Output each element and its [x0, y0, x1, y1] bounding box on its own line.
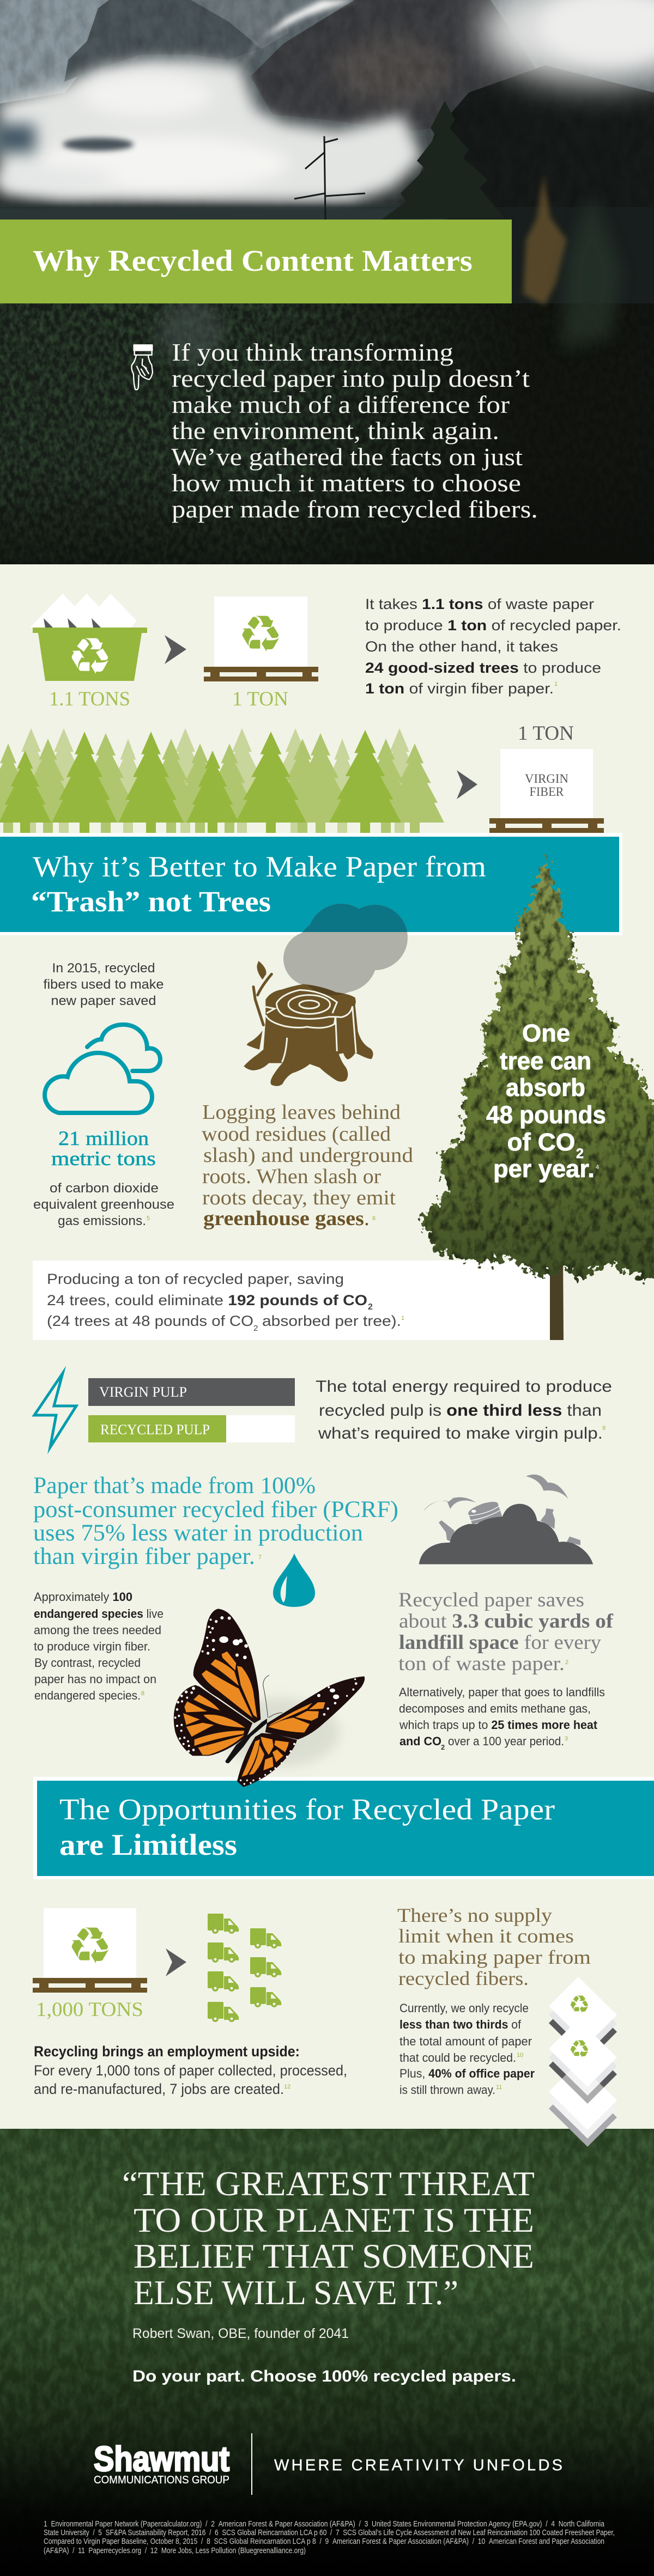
- call to action: Do your part. Choose 100% recycled papers.: [132, 2367, 516, 2385]
- text: endangered species: to produce virgin fiber.: [34, 1640, 150, 1653]
- text: endangered species: Approximately 100: [34, 1590, 132, 1604]
- text: recycling rate: Plus, 40% of office paper: [399, 2067, 535, 2080]
- text: landfill space: landfill space for every: [399, 1631, 602, 1654]
- text: logging residues: 6: [372, 1215, 376, 1222]
- tagline: WHERE CREATIVITY UNFOLDS: [274, 2457, 562, 2474]
- quote: TO OUR PLANET IS THE: [134, 2201, 534, 2239]
- stat: 21 million metric tons: metric tons: [51, 1148, 156, 1170]
- text: landfill space: Recycled paper saves: [398, 1589, 584, 1611]
- panel: forest photo footer: [0, 2129, 654, 2576]
- intro paragraph: We’ve gathered the facts on just: [171, 443, 523, 471]
- stat: 21 million metric tons: [33, 1128, 174, 1228]
- footnotes: (AF&PA) / 11 Paperrecycles.org / 12 More Jobs, Less Pollution (Bluegreenalliance.org): [44, 2546, 306, 2555]
- callout: 192 pounds: 2: [368, 1302, 373, 1312]
- stat: 2015 intro text: new paper saved: [51, 994, 156, 1008]
- icon: virgin fiber paper on pallet: FIBER: [530, 785, 564, 799]
- label: 1 ton: 1 TON: [232, 688, 288, 710]
- callout: 192 pounds: 1: [401, 1315, 404, 1322]
- callout: 192 pounds: Producing a ton of recycled paper, saving: [47, 1271, 344, 1287]
- text: energy: [316, 1378, 612, 1442]
- text: water use: post-consumer recycled fiber (PCRF): [33, 1497, 398, 1523]
- intro paragraph: the environment, think again.: [172, 417, 499, 444]
- quote attribution: Robert Swan, OBE, founder of 2041: [132, 2326, 349, 2341]
- quote: BELIEF THAT SOMEONE: [134, 2237, 534, 2275]
- intro paragraph: make much of a difference for: [172, 391, 510, 418]
- text: endangered species: endangered species.: [34, 1689, 141, 1702]
- text: water use: than virgin fiber paper.: [33, 1544, 255, 1569]
- photo: tall spruce tree: [420, 856, 654, 1340]
- text: one tree can absorb: One: [522, 1019, 570, 1047]
- icon: lightning bolt: [34, 1373, 76, 1447]
- text: water use: Paper that’s made from 100%: [33, 1473, 316, 1499]
- logo: Shawmut Communications Group: COMMUNICATIONS GROUP: [94, 2474, 229, 2486]
- text: energy: 9: [602, 1425, 605, 1432]
- icon: recycled paper on pallet: [204, 596, 318, 681]
- text: tons of waste paper: 24 good-sized trees to produce: [365, 660, 601, 676]
- text: recycling rate: Currently, we only recycle: [399, 2001, 529, 2015]
- panel: paper comparison: [0, 594, 621, 833]
- text: water use: uses 75% less water in production: [33, 1520, 363, 1546]
- text: no supply limit: to making paper from: [398, 1946, 591, 1968]
- icon: landfill with birds: [419, 1475, 593, 1564]
- text: landfill space: 2: [441, 1743, 445, 1751]
- heading band: better from trash: [0, 833, 622, 935]
- panel: hero mountain photo: [0, 0, 654, 564]
- illustration: monarch butterfly: [174, 1609, 365, 1787]
- stat: 21 million metric tons: 5: [147, 1215, 150, 1222]
- text: recycling rate: that could be recycled.: [399, 2051, 516, 2065]
- text: one tree can absorb: per year.: [493, 1155, 595, 1183]
- bar chart: energy use: VIRGIN PULP: [99, 1384, 187, 1400]
- icon: pointing hand: [131, 345, 153, 389]
- stat: 21 million metric tons: gas emissions.: [58, 1214, 146, 1228]
- text: energy: The total energy required to produce: [316, 1378, 612, 1396]
- text: logging residues: wood residues (called: [202, 1123, 391, 1146]
- bar chart: energy use: [88, 1378, 295, 1442]
- heading band: better from trash: “Trash” not Trees: [31, 885, 271, 918]
- text: landfill space: over a 100 year period.: [448, 1734, 564, 1748]
- dark green tree: [561, 191, 621, 349]
- label: 1 ton virgin: 1 TON: [518, 722, 574, 745]
- icon: virgin fiber paper on pallet: VIRGIN: [525, 772, 568, 785]
- text: landfill space: and CO: [399, 1734, 441, 1748]
- quote: ELSE WILL SAVE IT.”: [134, 2274, 458, 2312]
- intro paragraph: recycled paper into pulp doesn’t: [172, 364, 530, 392]
- icons: seven trucks: [208, 1914, 281, 2022]
- stat: 2015 intro text: [44, 961, 164, 1008]
- text: endangered species: By contrast, recycled: [34, 1656, 141, 1670]
- icon: recycling bin with papers: [30, 594, 147, 681]
- text: landfill space: ton of waste paper.: [398, 1653, 565, 1675]
- text: tons of waste paper: [365, 596, 621, 697]
- text: one tree can absorb: absorb: [506, 1074, 585, 1101]
- text: recycling rate: the total amount of paper: [399, 2035, 532, 2048]
- stat: 21 million metric tons: equivalent greenhouse: [33, 1197, 174, 1212]
- text: logging residues: slash) and underground: [203, 1144, 413, 1167]
- illustration: smoke cloud: [283, 904, 408, 995]
- text: energy: what’s required to make virgin pulp.: [318, 1424, 603, 1442]
- text: recycling rate: 11: [496, 2084, 502, 2091]
- text: endangered species: 8: [141, 1690, 144, 1697]
- cloud mass: [0, 60, 422, 203]
- text: recycling rate: less than two thirds of: [399, 2018, 522, 2031]
- intro paragraph: how much it matters to choose: [172, 469, 521, 497]
- callout: 192 pounds: [33, 1260, 550, 1340]
- text: tons of waste paper: 1: [554, 681, 558, 687]
- text: endangered species: [34, 1590, 164, 1702]
- text: landfill space: [398, 1589, 614, 1751]
- text: endangered species: paper has no impact on: [34, 1672, 156, 1686]
- pine tree: [382, 101, 504, 220]
- text: no supply limit: limit when it comes: [398, 1925, 574, 1947]
- text: water use: 7: [258, 1554, 262, 1561]
- heading band: better from trash: Why it’s Better to Make Paper from: [33, 850, 486, 883]
- text: employment upside: and re-manufactured, 7 jobs are created.: [34, 2081, 284, 2097]
- icon: clouds: [45, 1025, 160, 1113]
- icon: stacked paper sheets: [549, 1977, 617, 2147]
- stat: 21 million metric tons: of carbon dioxide: [50, 1181, 159, 1196]
- text: no supply limit: recycled fibers.: [398, 1968, 529, 1989]
- text: water use: [33, 1473, 398, 1569]
- text: energy: recycled pulp is one third less than: [319, 1402, 602, 1420]
- title band: why recycled content matters: [0, 220, 512, 303]
- text: tons of waste paper: 1 ton of virgin fiber paper.: [365, 680, 554, 697]
- text: employment upside: 12: [284, 2084, 290, 2090]
- text: endangered species: endangered species live: [34, 1607, 164, 1621]
- intro paragraph: paper made from recycled fibers.: [172, 495, 538, 523]
- text: endangered species: among the trees needed: [34, 1623, 161, 1637]
- illustration: tree stump: [244, 961, 373, 1086]
- text: employment upside: [34, 2043, 347, 2097]
- text: employment upside: For every 1,000 tons of paper collected, processed,: [34, 2062, 347, 2079]
- text: tons of waste paper: On the other hand, it takes: [365, 638, 558, 655]
- callout: 192 pounds: (24 trees at 48 pounds of CO: [47, 1313, 253, 1329]
- text: one tree can absorb: of CO: [507, 1128, 576, 1156]
- text: no supply limit: [397, 1904, 591, 1989]
- icon: water drop: [273, 1554, 315, 1607]
- footnotes: [44, 2519, 615, 2555]
- callout: 192 pounds: absorbed per tree).: [262, 1313, 401, 1329]
- text: landfill space: about 3.3 cubic yards of: [399, 1610, 614, 1633]
- callout: 192 pounds: 2: [253, 1324, 258, 1333]
- quote: [122, 2165, 535, 2312]
- icon: virgin fiber paper on pallet: [489, 749, 604, 833]
- text: logging residues: Logging leaves behind: [202, 1101, 401, 1124]
- heading band: opportunities are limitless: The Opportunities for Recycled Paper: [59, 1793, 555, 1826]
- heading band: opportunities are limitless: are Limitless: [59, 1828, 237, 1861]
- stat: 2015 intro text: In 2015, recycled: [52, 961, 155, 976]
- label: 1,000 tons: 1,000 TONS: [36, 1999, 143, 2021]
- label: 1.1 tons: 1.1 TONS: [49, 688, 130, 710]
- intro paragraph: [171, 338, 538, 523]
- stat: 21 million metric tons: 21 million: [58, 1128, 149, 1150]
- intro paragraph: If you think transforming: [172, 338, 453, 366]
- arrow: [166, 1948, 186, 1976]
- text: landfill space: 3: [565, 1735, 568, 1742]
- bar chart: energy use: RECYCLED PULP: [100, 1422, 210, 1438]
- quote: “THE GREATEST THREAT: [122, 2165, 535, 2203]
- text: logging residues: roots decay, they emit: [202, 1186, 396, 1209]
- icon: paper on pallet, 1,000 tons: [33, 1908, 147, 1993]
- text: employment upside: Recycling brings an employment upside:: [34, 2043, 300, 2060]
- arrow: [457, 770, 477, 799]
- text: one tree can absorb: 2: [576, 1146, 584, 1161]
- text: recycling rate: [399, 2001, 535, 2097]
- text: one tree can absorb: 48 pounds: [486, 1101, 606, 1129]
- orange tree: [523, 174, 567, 305]
- text: landfill space: decomposes and emits methane gas,: [399, 1702, 591, 1715]
- text: one tree can absorb: tree can: [500, 1047, 591, 1075]
- illustration: forest of 24 trees: [0, 728, 444, 833]
- heading band: opportunities are limitless: [33, 1777, 654, 1879]
- text: recycling rate: 10: [517, 2052, 523, 2059]
- text: landfill space: Alternatively, paper that goes to landfills: [399, 1685, 605, 1699]
- text: no supply limit: There’s no supply: [397, 1904, 552, 1926]
- text: logging residues: greenhouse gases .: [203, 1207, 370, 1230]
- text: logging residues: [202, 1101, 413, 1230]
- logo: Shawmut Communications Group: Shawmut: [94, 2439, 229, 2478]
- title band: why recycled content matters: Why Recycled Content Matters: [33, 244, 473, 277]
- text: one tree can absorb: [486, 1019, 606, 1183]
- bare tree: [294, 136, 365, 220]
- text: landfill space: 2: [565, 1659, 568, 1666]
- stat: 2015 intro text: fibers used to make: [44, 977, 164, 992]
- text: tons of waste paper: to produce 1 ton of recycled paper.: [365, 617, 621, 634]
- text: logging residues: roots. When slash or: [202, 1165, 381, 1188]
- arrow: [165, 635, 186, 664]
- text: recycling rate: is still thrown away.: [399, 2083, 495, 2097]
- text: tons of waste paper: It takes 1.1 tons of waste paper: [365, 596, 594, 612]
- callout: 192 pounds: 24 trees, could eliminate 192 pounds of CO: [47, 1292, 367, 1308]
- text: one tree can absorb: 4: [596, 1164, 599, 1171]
- text: landfill space: which traps up to 25 times more heat: [399, 1718, 598, 1732]
